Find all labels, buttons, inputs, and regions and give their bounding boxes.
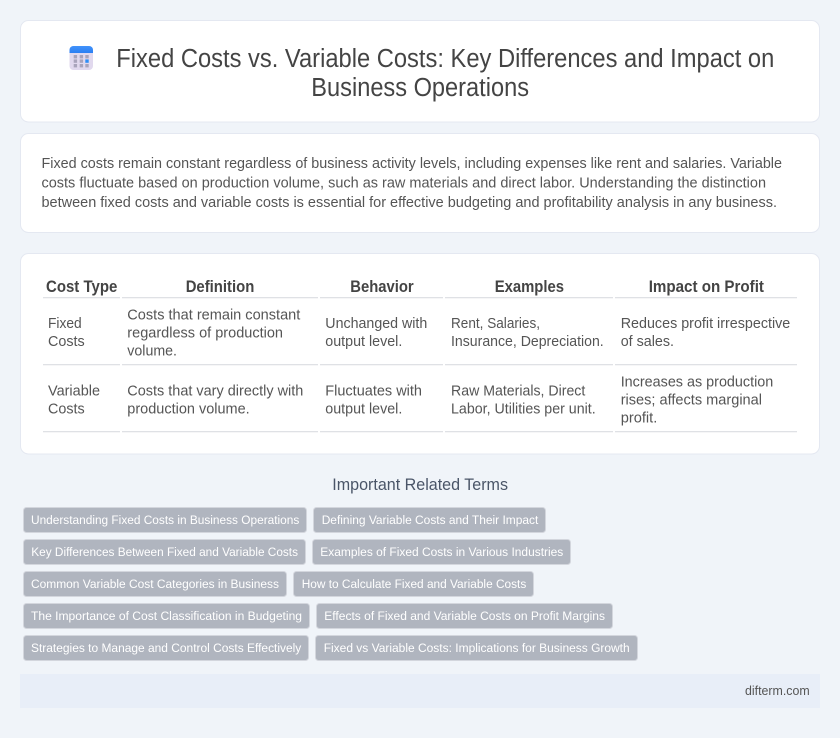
description text: costs fluctuate based on production volume, such as raw materials and direct labor. Understanding the distinction [42,176,766,192]
related terms tags [24,508,638,660]
table row: variable costs: production volume. [127,401,250,417]
header panel [20,20,820,122]
table row: fixed costs [43,307,797,365]
tag [24,508,306,532]
comparison table panel [20,254,820,454]
tag: Examples of Fixed Costs in Various Industries [320,545,563,559]
tag: Strategies to Manage and Control Costs Effectively [31,641,302,655]
table row: fixed costs: output level. [325,334,402,350]
tag: The Importance of Cost Classification in Budgeting [31,609,302,623]
related terms heading: Important Related Terms [332,476,508,494]
tag [24,636,308,660]
tag [316,636,638,660]
tag [314,508,546,532]
table row: variable costs: Costs [48,401,85,417]
table header row: Cost Type [46,278,117,296]
table row: variable costs: Costs that vary directly with [127,383,303,399]
tag: Fixed vs Variable Costs: Implications for Business Growth [324,641,630,655]
table row: fixed costs: Insurance, Depreciation. [451,334,604,350]
table header row: Behavior [350,278,414,296]
table row: variable costs: output level. [325,401,402,417]
title: Fixed Costs vs. Variable Costs: Key Differences and Impact on [116,45,774,73]
tag [24,540,306,564]
table row: fixed costs: of sales. [621,334,674,350]
table row: fixed costs: regardless of production [127,325,283,341]
table header row: Definition [186,278,254,296]
tag: Defining Variable Costs and Their Impact [322,513,539,527]
table row: variable costs: Labor, Utilities per unit. [451,401,596,417]
tag: How to Calculate Fixed and Variable Costs [302,577,526,591]
description text [42,156,782,211]
tag: Effects of Fixed and Variable Costs on Profit Margins [324,609,605,623]
table row: fixed costs: Unchanged with [325,316,427,332]
title: Business Operations [311,74,529,102]
table row: variable costs: Variable [48,383,100,399]
tag: Common Variable Cost Categories in Business [31,577,279,591]
table row: variable costs: profit. [621,411,657,427]
tag [24,604,310,628]
footer bar [20,674,820,708]
tag [316,604,612,628]
tag [294,572,534,596]
table header row: Examples [495,278,564,296]
table row: fixed costs: Rent, Salaries, [451,316,540,332]
tag [312,540,570,564]
table row: variable costs: Raw Materials, Direct [451,383,585,399]
footer bar: difterm.com [745,683,810,698]
table row: fixed costs: Reduces profit irrespective [621,316,790,332]
description text: between fixed costs and variable costs is essential for effective budgeting and profitability analysis in any business. [42,195,777,211]
tag [24,572,286,596]
table row: fixed costs: Costs [48,334,85,350]
table header row [43,278,797,298]
table row: variable costs: Fluctuates with [325,383,422,399]
table row: fixed costs: volume. [127,343,177,359]
tag: Understanding Fixed Costs in Business Operations [31,513,299,527]
tag: Key Differences Between Fixed and Variable Costs [31,545,298,559]
table row: fixed costs: Costs that remain constant [127,307,300,323]
table row: variable costs: rises; affects marginal [621,393,762,409]
description text: Fixed costs remain constant regardless of business activity levels, including expenses like rent and salaries. Variable [42,156,782,172]
table row: fixed costs: Fixed [48,316,82,332]
description panel [20,134,820,232]
table row: variable costs [43,375,797,432]
title [116,45,774,102]
icon: calendar [70,46,93,70]
table row: variable costs: Increases as production [621,375,773,391]
table header row: Impact on Profit [649,278,764,296]
